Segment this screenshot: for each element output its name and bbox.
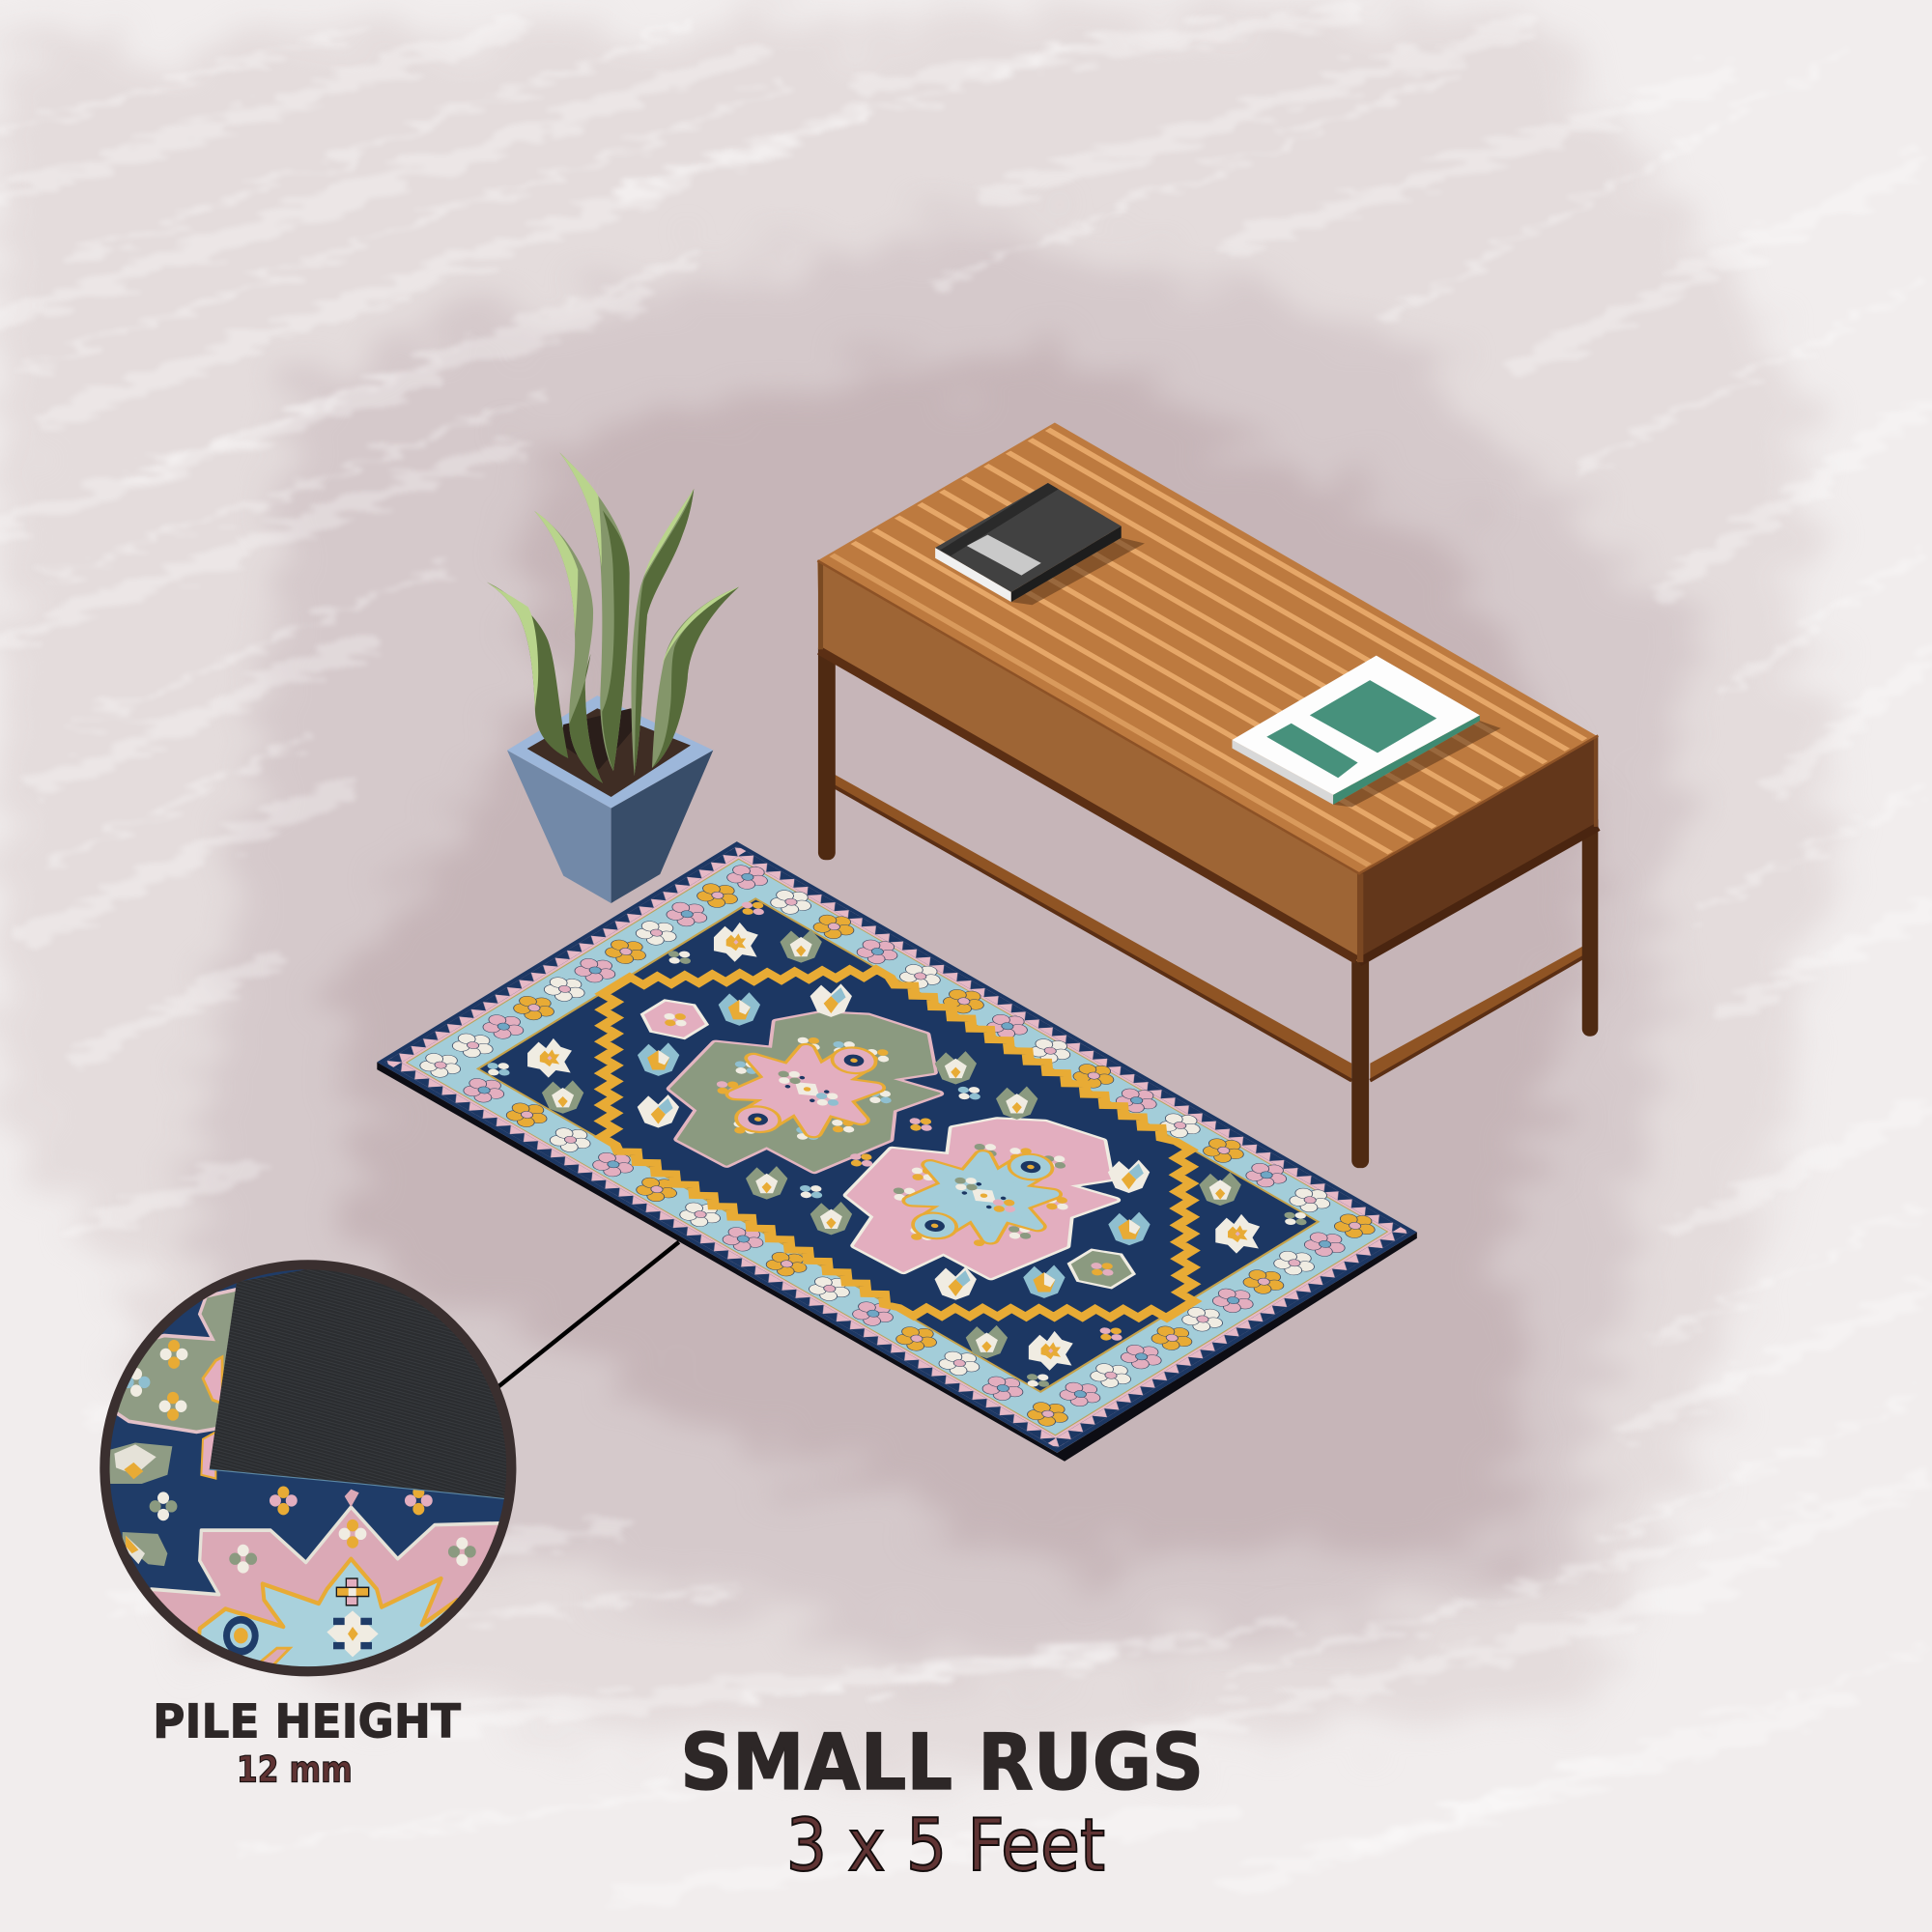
rug border: zigzag and flower band [377,841,1417,1453]
coffee table [817,423,1598,1168]
leaf centre [559,452,630,771]
potted plant [487,452,739,903]
rug: yellow stepped hexagon [477,897,1323,1395]
white magazine with green panels [1233,656,1501,807]
connector line from rug to detail circle [496,1242,679,1389]
label: pile height: PILE HEIGHT [153,1694,461,1748]
leaf far left [487,582,568,758]
pot [507,696,713,903]
leaf centre right [632,489,694,776]
label: pile height [153,1694,461,1790]
table: striped top surface [817,423,1596,873]
black notebook [935,483,1145,605]
table: far stretcher and legs [818,640,1598,1168]
table: left side face [817,560,1359,962]
leaf far right [652,587,739,768]
detail circle: pile height close-up [99,1250,528,1682]
rug thickness edge [377,1062,1417,1462]
rug: pink medallion [794,1083,1172,1308]
rug field [478,898,1319,1392]
table: right side face [1359,735,1598,962]
title: small rugs: SMALL RUGS [680,1717,1204,1807]
label: pile height: 12 mm [237,1748,353,1790]
subtitle: size: 3 x 5 Feet [786,1803,1105,1888]
rug: tulip and corner motifs [467,894,1323,1396]
leaf centre left [534,511,603,783]
rug: green medallion [617,977,995,1202]
isometric patterned rug [377,841,1417,1453]
